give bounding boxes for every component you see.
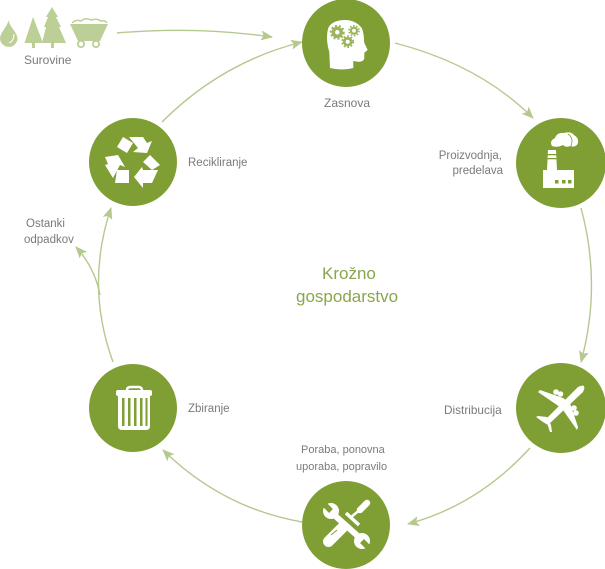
node: recycling [89, 118, 177, 206]
node: use [302, 481, 390, 569]
arrow: distribution to use [408, 448, 530, 524]
title: circular economy: Krožno [322, 264, 376, 283]
node: design [302, 0, 390, 87]
label: raw materials: Surovine [24, 53, 72, 67]
label: collection: Zbiranje [188, 403, 230, 415]
icon: airplane [536, 386, 584, 432]
label: production: Proizvodnja, [439, 150, 502, 162]
node: production [516, 118, 605, 208]
label: use, reuse: Poraba, ponovna [301, 444, 386, 456]
label: distribution: Distribucija [444, 403, 502, 417]
arrow: production to distribution [581, 208, 592, 362]
icon: wrench and screwdriver [321, 501, 372, 551]
label: reuse, repair: uporaba, popravilo [296, 461, 387, 473]
icon: recycling arrows [105, 137, 160, 188]
label: residual: Ostanki [26, 218, 65, 230]
label: processing: predelava [452, 165, 504, 177]
node: collection [89, 364, 177, 452]
title line two: gospodarstvo [296, 287, 398, 306]
label: waste: odpadkov [24, 234, 74, 246]
arrow: collection to recycling [98, 208, 113, 362]
icon: head with gears [327, 20, 368, 70]
arrow: recycling to design [162, 42, 302, 122]
icon: raw materials [0, 7, 108, 48]
arrow: design to production [395, 43, 533, 118]
node: distribution [516, 363, 605, 453]
label: design: Zasnova [324, 96, 370, 110]
arrow: collection to residual waste [76, 247, 100, 295]
icon: factory [543, 132, 578, 188]
label: recycling: Recikliranje [188, 157, 247, 169]
icon: trash bin [116, 387, 152, 430]
arrow: raw materials to design [117, 30, 272, 37]
arrow: use to collection [163, 450, 302, 522]
